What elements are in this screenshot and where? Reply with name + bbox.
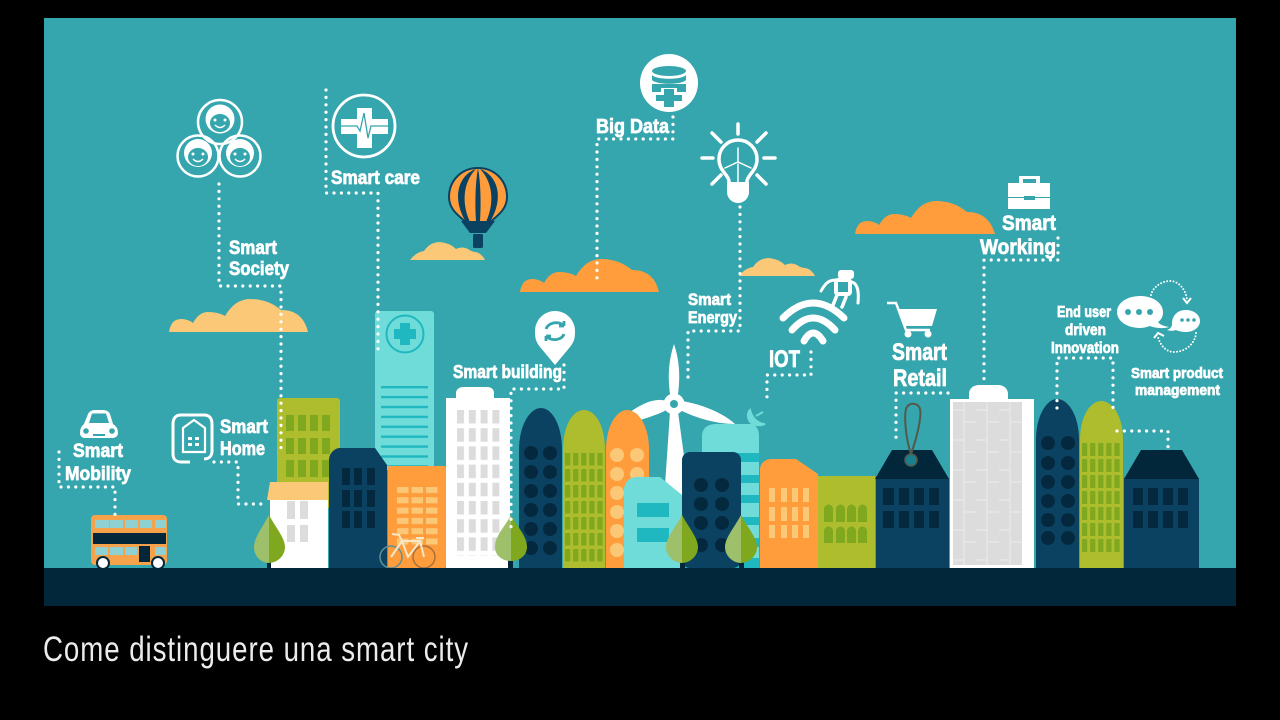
label: Smart Home: [220, 417, 269, 460]
bus: [91, 515, 167, 569]
cloud: big data: [520, 259, 659, 292]
label: Smart Home: Home: [220, 439, 265, 460]
building: navy house right: [1124, 450, 1199, 568]
label: Smart product management: [1131, 365, 1223, 399]
label: Smart Retail: Smart: [892, 339, 947, 366]
label: End user driven Innovation: driven: [1065, 322, 1106, 339]
trees: [254, 515, 757, 568]
label: IOT: IOT: [769, 346, 800, 373]
building: cyan back tower: [702, 424, 759, 568]
panel: city illustration background: [44, 18, 1236, 606]
label: Smart Mobility: Smart: [73, 440, 123, 462]
building: cyan hospital tower: [375, 311, 434, 470]
label: Smart Working: Smart: [1002, 211, 1056, 235]
label: Smart product management: Smart product: [1131, 365, 1223, 382]
building: orange chamfered: [760, 459, 818, 568]
label: Smart care: Smart care: [331, 168, 420, 189]
label: Big Data: Big Data: [596, 116, 670, 138]
label: Smart Retail: Retail: [893, 365, 947, 392]
label: End user driven Innovation: End user: [1057, 304, 1111, 321]
building: white tall: [950, 385, 1034, 568]
icon: speech bubbles: [1117, 281, 1200, 352]
cloud: working: [855, 201, 995, 234]
building: orange oval: [606, 410, 649, 568]
label: Smart Society: [229, 238, 289, 280]
label: End user driven Innovation: Innovation: [1051, 340, 1119, 357]
label: Smart Home: Smart: [220, 417, 269, 438]
dotted connector lines: [59, 90, 1168, 527]
cloud: energy: [739, 258, 815, 276]
building: navy: [329, 448, 387, 568]
label: End user driven Innovation: [1051, 304, 1119, 357]
label: Smart Energy: Smart: [688, 291, 731, 309]
building: navy oval right: [1036, 399, 1079, 568]
icon: car: [80, 410, 118, 438]
label: Smart Society: Society: [229, 259, 289, 280]
building: navy rounded: [682, 452, 741, 568]
icon: smart care: [333, 95, 395, 157]
label: Smart Retail: [892, 339, 947, 392]
label: Smart product management: management: [1135, 382, 1220, 399]
caption: Come distinguere una smart city: [43, 630, 469, 669]
cloud: balloon: [410, 242, 485, 260]
label: Smart Energy: [688, 291, 738, 327]
building: navy house with price tag: [875, 404, 949, 568]
building: navy oval: [519, 408, 562, 568]
icon: location pin: [535, 311, 575, 365]
label: Smart Society: Smart: [229, 238, 278, 259]
icon: light bulb with turbine: [702, 124, 775, 203]
icon: briefcase: [1008, 176, 1050, 209]
building: green oval right: [1080, 401, 1123, 568]
icon: home: [173, 415, 212, 462]
bicycle: [380, 534, 435, 568]
ground: [44, 568, 1236, 606]
building: green low: [818, 476, 875, 568]
building: white tower: [446, 387, 510, 568]
building: orange: [388, 466, 446, 568]
icon: society: [178, 100, 260, 176]
icon: satellite dish: [748, 410, 765, 425]
label: Smart Mobility: Mobility: [65, 463, 131, 485]
wind turbine: [630, 344, 735, 500]
label: Smart building: Smart building: [453, 362, 562, 382]
label: Smart Energy: Energy: [688, 309, 738, 327]
building: cyan small: [624, 477, 682, 568]
icon: shopping cart: [887, 303, 937, 338]
label: Smart Working: [980, 211, 1056, 259]
cloud: society: [169, 299, 308, 332]
icon: big data: [640, 54, 698, 112]
icon: wifi and robot: [783, 270, 858, 341]
building: green oval: [563, 410, 605, 568]
label: Smart Working: Working: [980, 235, 1056, 259]
label: Smart Mobility: [65, 440, 131, 485]
building: green rear: [277, 398, 340, 508]
icon: hot air balloon: [449, 168, 507, 248]
building: white shop: [267, 482, 328, 568]
